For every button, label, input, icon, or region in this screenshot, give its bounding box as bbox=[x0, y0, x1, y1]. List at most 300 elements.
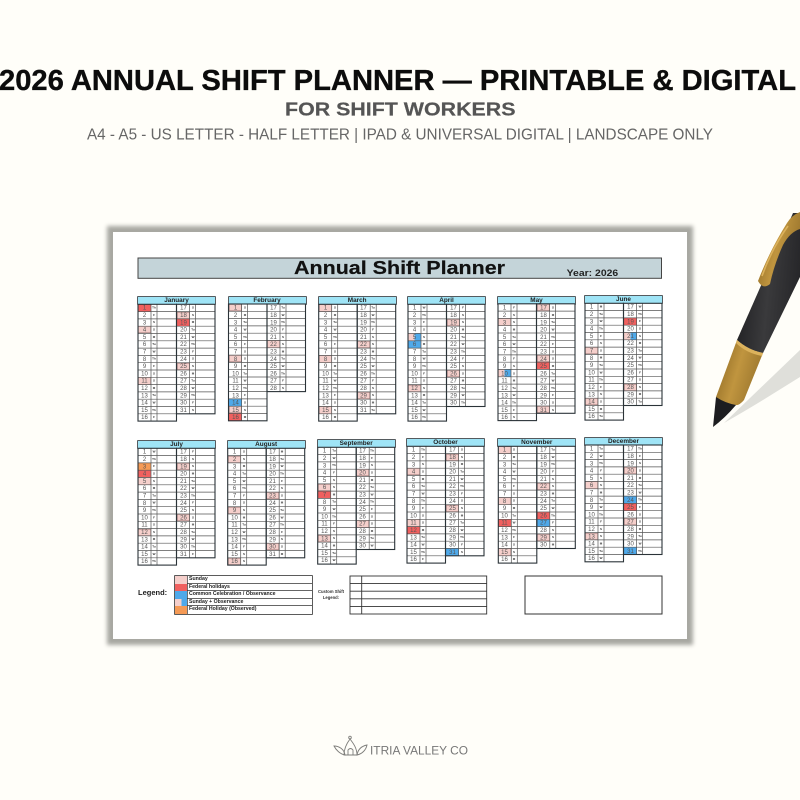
days 1-16: 6 bbox=[143, 485, 146, 492]
days 1-16: F bbox=[422, 507, 424, 510]
days 17-30: 19 bbox=[627, 318, 633, 325]
days 1-16: 15 bbox=[231, 551, 238, 557]
days 1-16: 14 bbox=[588, 398, 595, 405]
days 1-16: 14 bbox=[588, 540, 595, 547]
days 17-31: W bbox=[191, 335, 194, 339]
days 17-31: Th bbox=[460, 485, 463, 488]
days 17-31: S bbox=[551, 357, 554, 360]
days 1-16: W bbox=[153, 401, 155, 404]
legend row: Sunday + Observance bbox=[175, 599, 312, 606]
days 1-16: 4 bbox=[503, 468, 506, 475]
days 1-16: 5 bbox=[503, 476, 506, 482]
days 1-16: 3 bbox=[233, 319, 237, 326]
days 1-16: F bbox=[600, 469, 602, 472]
month: May bbox=[497, 296, 576, 420]
days 17-31: 23 bbox=[180, 492, 186, 499]
days 17-28: F bbox=[282, 379, 284, 382]
days 17-30: 23 bbox=[359, 491, 366, 498]
days 1-16: S bbox=[153, 379, 155, 383]
days 17-30: 21 bbox=[359, 477, 366, 483]
days 17-31: W bbox=[551, 379, 554, 382]
days 1-16: W bbox=[422, 543, 424, 546]
days 1-16: Tu bbox=[422, 401, 426, 404]
days 17-31: W bbox=[638, 542, 641, 545]
days 17-28: W bbox=[282, 313, 284, 317]
days 17-30: Tu bbox=[551, 448, 555, 452]
days 1-16: 14 bbox=[232, 399, 238, 406]
planner title bar bbox=[138, 257, 662, 279]
days 1-16: 5 bbox=[323, 477, 326, 483]
days 17-30: S bbox=[552, 485, 554, 488]
days 17-31: S bbox=[372, 387, 374, 390]
days 17-30: 22 bbox=[627, 340, 633, 347]
days 1-16: M bbox=[243, 415, 246, 419]
days 1-16: S bbox=[243, 306, 246, 309]
days 1-16: 1 bbox=[413, 305, 416, 311]
days 1-16: 4 bbox=[233, 470, 236, 477]
days 17-31: 20 bbox=[627, 467, 633, 474]
days 17-30: 27 bbox=[359, 521, 366, 527]
days 17-30: 29 bbox=[540, 534, 547, 541]
days 1-16: S bbox=[334, 306, 336, 310]
days 1-16: Tu bbox=[152, 545, 156, 548]
days 17-31: Tu bbox=[371, 306, 375, 310]
days 17-31: 25 bbox=[180, 363, 186, 370]
days 1-16: 6 bbox=[412, 483, 415, 490]
days 17-30: W bbox=[551, 456, 554, 459]
days 1-16: 11 bbox=[141, 378, 148, 384]
days 17-30: Tu bbox=[638, 400, 641, 403]
days 17-31: 25 bbox=[180, 507, 186, 514]
days 1-16: S bbox=[243, 401, 246, 404]
days 17-30: W bbox=[371, 544, 374, 547]
days 1-16: 15 bbox=[141, 551, 148, 557]
days 1-16: Tu bbox=[599, 498, 603, 501]
days 1-16: 3 bbox=[413, 319, 416, 326]
days 17-28: 26 bbox=[270, 370, 277, 377]
days 17-31: 26 bbox=[180, 370, 186, 377]
days 1-16: 15 bbox=[410, 549, 417, 555]
days 1-16: Th bbox=[421, 499, 425, 503]
days 1-16: 7 bbox=[590, 347, 593, 354]
days 1-16: S bbox=[333, 537, 335, 540]
days 17-30: S bbox=[371, 522, 373, 526]
days 1-16: 12 bbox=[141, 385, 148, 392]
days 17-31: 26 bbox=[269, 514, 276, 521]
days 1-16: 14 bbox=[141, 399, 148, 406]
days 17-30: M bbox=[371, 478, 373, 482]
days 1-16: S bbox=[243, 458, 245, 461]
days 1-16: 13 bbox=[321, 535, 328, 542]
days 17-30: S bbox=[371, 464, 373, 467]
days 17-30: S bbox=[461, 365, 464, 368]
days 1-16: M bbox=[423, 394, 425, 397]
days 17-30: Th bbox=[551, 514, 555, 517]
days 17-30: 25 bbox=[359, 506, 366, 513]
days 17-30: 22 bbox=[359, 484, 366, 491]
legend row: Federal holidays: Federal holidays bbox=[189, 584, 230, 590]
days 1-16: M bbox=[332, 544, 335, 547]
days 1-16: 15 bbox=[501, 406, 508, 413]
days 17-31: 17 bbox=[180, 449, 186, 455]
days 17-31: 30 bbox=[449, 541, 455, 548]
days 17-31: 27 bbox=[269, 522, 276, 528]
days 1-16: S bbox=[513, 371, 515, 375]
days 1-16: M bbox=[513, 507, 516, 510]
days 17-30: 24 bbox=[450, 356, 456, 362]
days 1-16: 1 bbox=[503, 304, 506, 311]
days 17-31: 18 bbox=[180, 312, 186, 319]
days 1-16: 9 bbox=[590, 362, 593, 369]
days 17-31: S bbox=[281, 545, 283, 548]
days 17-30: W bbox=[461, 394, 464, 397]
days 1-16: 8 bbox=[590, 355, 593, 361]
days 17-30: M bbox=[638, 342, 641, 345]
days 1-16: M bbox=[600, 491, 602, 494]
days 17-31: 24 bbox=[180, 356, 186, 362]
days 17-30: 30 bbox=[450, 399, 456, 406]
days 1-16: Tu bbox=[242, 523, 245, 527]
days 1-16: 5 bbox=[503, 333, 506, 340]
days 17-30: Th bbox=[638, 313, 641, 316]
days 17-31: 26 bbox=[540, 370, 546, 376]
days 1-16: S bbox=[513, 492, 515, 495]
days 1-16: 2 bbox=[590, 453, 593, 459]
days 1-16: Th bbox=[599, 513, 603, 516]
days 1-16: 1 bbox=[143, 449, 146, 455]
days 1-16: 12 bbox=[232, 385, 238, 391]
days 1-16: 8 bbox=[503, 498, 506, 504]
days 1-16: Th bbox=[422, 365, 426, 368]
days 1-16: 3 bbox=[324, 319, 327, 326]
month: December bbox=[584, 437, 663, 561]
days 17-30: Tu bbox=[461, 335, 464, 339]
days 17-31: 25 bbox=[540, 362, 546, 369]
days 1-16: 3 bbox=[590, 460, 593, 467]
days 17-31: S bbox=[460, 550, 462, 554]
days 17-28: 19 bbox=[270, 319, 277, 326]
days 17-31: Th bbox=[191, 394, 194, 397]
days 1-16: Tu bbox=[152, 394, 156, 397]
days 1-16: 12 bbox=[410, 527, 417, 534]
days 17-31: S bbox=[191, 306, 194, 310]
days 17-30: W bbox=[371, 493, 374, 496]
days 1-16: F bbox=[153, 416, 155, 419]
days 1-16: S bbox=[334, 408, 336, 412]
days 1-16: 10 bbox=[588, 511, 595, 518]
days 17-31: Tu bbox=[191, 479, 194, 483]
days 17-31: 30 bbox=[360, 399, 367, 406]
days 1-16: M bbox=[153, 335, 155, 339]
days 17-31: 23 bbox=[180, 348, 186, 355]
days 17-31: 25 bbox=[360, 363, 367, 370]
days 17-31: 18 bbox=[540, 311, 546, 318]
custom shift legend label: Custom Shift bbox=[318, 589, 344, 594]
days 1-16: Tu bbox=[513, 463, 516, 466]
days 17-30: F bbox=[639, 371, 640, 374]
month: November bbox=[497, 438, 576, 563]
days 17-31: W bbox=[372, 365, 375, 368]
header: May: May bbox=[530, 296, 543, 304]
days 1-16: Th bbox=[152, 408, 156, 412]
days 1-16: Tu bbox=[242, 472, 245, 475]
days 17-31: S bbox=[638, 462, 640, 465]
days 1-16: 3 bbox=[503, 319, 506, 325]
days 17-31: Th bbox=[191, 494, 194, 497]
days 17-30 bbox=[537, 446, 575, 548]
days 1-16: 8 bbox=[503, 355, 506, 362]
days 1-16: 16 bbox=[588, 413, 595, 420]
days 1-16: 16 bbox=[141, 414, 148, 421]
days 1-16: Tu bbox=[421, 485, 425, 488]
days 17-31: 22 bbox=[180, 485, 186, 492]
legend table bbox=[175, 576, 312, 614]
days 17-30: S bbox=[638, 386, 640, 389]
days 1-16: S bbox=[334, 350, 336, 353]
days 17-30: Tu bbox=[370, 537, 374, 540]
days 17-30: 18 bbox=[450, 312, 456, 319]
days 17-31: Tu bbox=[638, 483, 641, 487]
days 1-16: 9 bbox=[324, 363, 327, 370]
brand name: ITRIA VALLEY CO bbox=[370, 746, 468, 758]
days 1-16: Th bbox=[242, 487, 246, 490]
days 1-16: M bbox=[513, 558, 516, 561]
days 1-16 bbox=[228, 448, 266, 565]
days 17-30 bbox=[446, 304, 485, 406]
days 17-31: S bbox=[551, 401, 554, 404]
days 1-16: S bbox=[333, 530, 335, 533]
days 1-16: Tu bbox=[152, 343, 156, 346]
days 17-31: M bbox=[281, 450, 283, 454]
days 1-16: S bbox=[333, 478, 335, 482]
days 1-16: S bbox=[513, 543, 515, 546]
days 1-16: Tu bbox=[512, 335, 516, 338]
days 1-16: 10 bbox=[501, 512, 508, 519]
days 17-31: S bbox=[638, 469, 640, 472]
days 17-30: S bbox=[461, 321, 464, 324]
days 1-16: 2 bbox=[143, 312, 146, 319]
days 17-28: 25 bbox=[270, 363, 277, 369]
days 17-31: 27 bbox=[360, 378, 367, 384]
days 17-30: Th bbox=[461, 401, 464, 404]
days 1-16: 13 bbox=[588, 391, 595, 398]
header: April: April bbox=[439, 297, 454, 304]
days 1-16: W bbox=[242, 479, 245, 483]
days 1-16: 8 bbox=[590, 496, 593, 503]
days 17-30: 19 bbox=[450, 319, 456, 326]
days 17-31: 28 bbox=[180, 529, 186, 536]
days 17-30: S bbox=[552, 536, 554, 539]
days 1-16: 11 bbox=[410, 520, 417, 526]
days 17-30 bbox=[356, 447, 395, 549]
days 1-16: 14 bbox=[322, 399, 329, 406]
days 1-16: Th bbox=[243, 386, 246, 390]
days 1-16: S bbox=[243, 350, 246, 353]
header: February bbox=[228, 297, 306, 304]
days 1-16: S bbox=[422, 521, 424, 525]
days 1-16: S bbox=[600, 527, 602, 531]
days 1-16: 12 bbox=[588, 384, 595, 391]
days 1-16 bbox=[319, 304, 357, 421]
days 1-16: Tu bbox=[599, 313, 603, 316]
days 17-31: S bbox=[281, 494, 283, 497]
days 1-16: 8 bbox=[412, 498, 415, 504]
days 1-16: M bbox=[422, 529, 424, 532]
days 17-28: 22 bbox=[270, 341, 277, 347]
legend row: Common Celebration bbox=[175, 591, 312, 599]
days 1-16: 1 bbox=[503, 447, 506, 453]
days 17-31: M bbox=[281, 501, 283, 505]
days 17-30: 21 bbox=[627, 333, 633, 339]
days 1-16: S bbox=[423, 335, 425, 339]
days 17-31: 19 bbox=[269, 463, 276, 470]
days 17-31: 31 bbox=[449, 549, 455, 555]
days 17-31: 31 bbox=[360, 407, 367, 413]
days 17-31: S bbox=[460, 499, 462, 503]
days 17-31: 27 bbox=[449, 520, 455, 526]
month: February bbox=[228, 296, 307, 420]
days 1-16: Tu bbox=[332, 500, 335, 504]
days 17-30: S bbox=[638, 327, 640, 330]
days 17-28: S bbox=[282, 386, 284, 390]
days 1-16: 5 bbox=[233, 478, 236, 484]
header: August bbox=[228, 441, 305, 448]
days 1-16: 12 bbox=[411, 385, 418, 392]
days 1-16: Tu bbox=[599, 549, 603, 552]
days 1-16: S bbox=[513, 320, 515, 324]
days 17-31: 28 bbox=[540, 384, 546, 391]
days 1-16: 12 bbox=[321, 528, 328, 535]
days 17-30: Th bbox=[370, 500, 374, 504]
days 17-31: Th bbox=[638, 498, 641, 501]
days 1-16: 3 bbox=[503, 461, 506, 468]
days 17-31: Th bbox=[191, 545, 194, 548]
days 17-30: 25 bbox=[540, 505, 547, 512]
days 17-31: S bbox=[372, 335, 374, 339]
days 1-16: S bbox=[153, 321, 155, 324]
days 1-16: 10 bbox=[588, 369, 595, 376]
header: September: September bbox=[340, 440, 373, 447]
days 17-31: 25 bbox=[627, 504, 633, 510]
days 1-16: S bbox=[243, 450, 245, 454]
days 1-16: 13 bbox=[141, 536, 148, 543]
days 17-31: 31 bbox=[269, 551, 276, 557]
days 1-16: M bbox=[333, 365, 336, 368]
header: January: January bbox=[164, 297, 189, 304]
days 1-16: 16 bbox=[231, 558, 238, 565]
days 1-16 bbox=[498, 304, 536, 421]
days 1-16: M bbox=[423, 343, 425, 346]
days 1-16: S bbox=[513, 364, 515, 367]
days 1-16: 13 bbox=[231, 536, 238, 543]
days 17-30: 28 bbox=[540, 527, 547, 534]
legend row: Common Celebration: Common Celebration / Observance bbox=[189, 591, 275, 597]
days 1-16: S bbox=[153, 531, 155, 534]
days 1-16: 2 bbox=[143, 456, 146, 463]
days 1-16: S bbox=[513, 448, 515, 452]
days 1-16: M bbox=[513, 379, 515, 382]
days 1-16: 15 bbox=[322, 407, 329, 413]
days 17-31: M bbox=[638, 476, 641, 479]
days 1-16: 13 bbox=[501, 534, 508, 541]
days 1-16: 5 bbox=[413, 334, 416, 340]
days 1-16: 8 bbox=[143, 356, 146, 362]
days 17-31: W bbox=[191, 538, 194, 541]
days 1-16: 14 bbox=[411, 399, 418, 406]
days 1-16: 1 bbox=[412, 447, 415, 453]
days 1-16: 7 bbox=[503, 490, 506, 497]
days 1-16: Th bbox=[152, 458, 156, 461]
days 1-16: W bbox=[513, 393, 515, 397]
days 17-28: 21 bbox=[270, 333, 277, 340]
header: December bbox=[585, 438, 662, 445]
days 17-31: M bbox=[191, 372, 194, 375]
days 17-31: Tu bbox=[371, 408, 375, 412]
days 1-16: 8 bbox=[324, 356, 327, 362]
days 17-31: 29 bbox=[180, 392, 186, 399]
days 1-16: S bbox=[243, 357, 246, 360]
days 1-16: 4 bbox=[233, 326, 237, 333]
days 17-31: 19 bbox=[180, 463, 186, 470]
days 1-16: M bbox=[513, 456, 516, 459]
days 17-31: 22 bbox=[540, 341, 546, 347]
days 1-16: 14 bbox=[321, 542, 328, 549]
days 17-31: M bbox=[372, 401, 374, 404]
days 1-16: 14 bbox=[141, 543, 148, 550]
days 17-30: M bbox=[552, 543, 554, 546]
days 1-16: 14 bbox=[231, 543, 238, 550]
days 17-31: 30 bbox=[627, 540, 633, 547]
days 17-30: M bbox=[461, 328, 464, 331]
days 17-30: 25 bbox=[627, 362, 633, 369]
days 17-30: W bbox=[461, 343, 464, 346]
legend row: Sunday: Sunday bbox=[189, 576, 208, 582]
month: July bbox=[137, 440, 216, 565]
days 1-16: Tu bbox=[332, 551, 335, 555]
days 17-31: 30 bbox=[269, 543, 276, 550]
days 17-30: 30 bbox=[540, 541, 547, 548]
days 1-16: 6 bbox=[143, 341, 146, 348]
days 1-16 bbox=[498, 446, 537, 563]
days 1-16: Th bbox=[421, 448, 425, 452]
days 1-16: 3 bbox=[143, 463, 146, 470]
days 17-31: S bbox=[460, 456, 462, 459]
days 1-16: 1 bbox=[233, 304, 237, 311]
days 1-16: 13 bbox=[501, 392, 508, 398]
days 17-30: S bbox=[461, 372, 464, 375]
days 1-16: 3 bbox=[233, 463, 236, 470]
days 1-16: 12 bbox=[231, 529, 238, 536]
days 17-28: S bbox=[282, 342, 284, 346]
days 17-31 bbox=[446, 446, 484, 556]
month: April bbox=[407, 296, 486, 421]
days 1-16: W bbox=[332, 457, 335, 460]
days 17-31: 20 bbox=[449, 468, 455, 475]
days 1-16: 9 bbox=[590, 504, 593, 510]
days 17-30: F bbox=[462, 306, 463, 310]
days 1-16: 9 bbox=[233, 507, 236, 514]
days 17-31: Tu bbox=[460, 521, 463, 525]
header: February: February bbox=[253, 297, 281, 304]
days 17-30: S bbox=[371, 471, 373, 474]
days 1-16: S bbox=[600, 483, 602, 487]
days 1-16: S bbox=[600, 535, 602, 538]
days 17-31: 29 bbox=[360, 392, 367, 399]
days 17-31: Tu bbox=[460, 470, 463, 473]
days 1-16: Th bbox=[333, 387, 337, 390]
days 1-16: 2 bbox=[503, 454, 506, 461]
days 17-30: 29 bbox=[359, 535, 366, 542]
